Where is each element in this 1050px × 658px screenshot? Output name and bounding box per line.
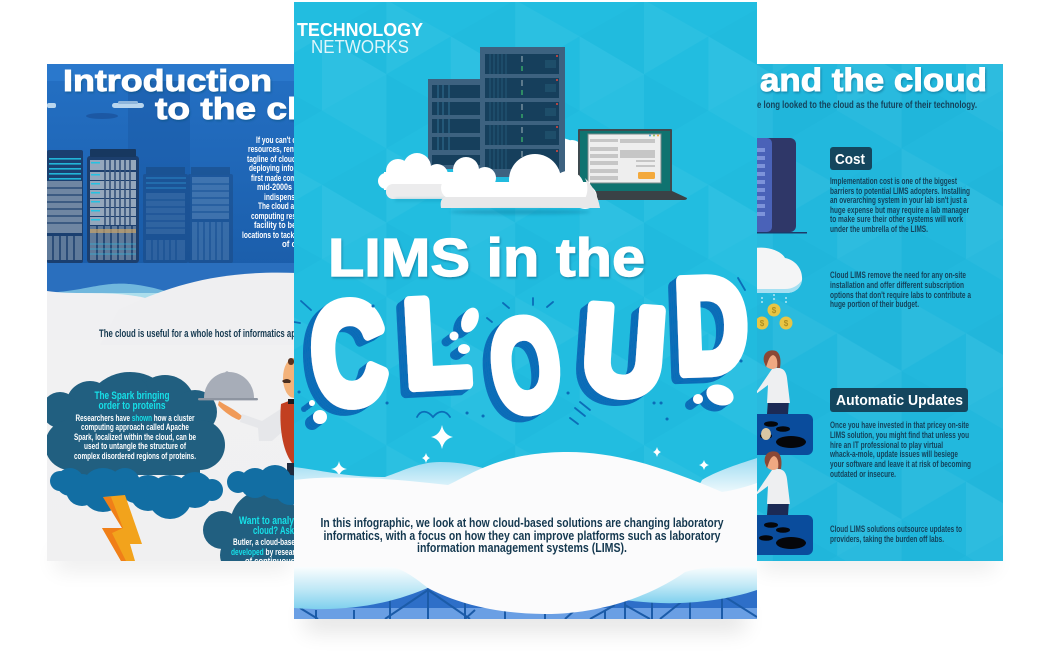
text: spark: used to untangle the structure of (84, 441, 187, 451)
panel shadows (55, 550, 995, 632)
heading: cost (830, 147, 872, 170)
text: cost problem: under the umbrella of the LIMS. (830, 224, 928, 234)
waiter with cloche (198, 358, 294, 476)
panel: introduction to the cloud (47, 64, 294, 561)
title: introduction to the cloud: to the clo (155, 91, 320, 126)
sparkles (331, 425, 709, 477)
faded server racks (143, 167, 233, 263)
short server rack (428, 79, 480, 169)
title: introduction to the cloud: Introduction (63, 63, 272, 98)
title: introduction to the cloud (64, 68, 294, 122)
decorative cloud blobs (309, 305, 737, 424)
light-blue waves (294, 458, 757, 609)
tall server rack (480, 47, 565, 177)
logo: technology networks (297, 23, 423, 53)
icon: server (757, 138, 807, 234)
panel: cover (294, 2, 757, 619)
text: spark: order to proteins (98, 400, 166, 412)
intro text: The cloud al (258, 201, 296, 211)
server rack 1 (47, 150, 83, 263)
icon: cloud raining coins (754, 248, 802, 330)
intro paragraph: informatics, with a focus on how they can improve platforms such as laboratory (324, 528, 721, 543)
heading: cost: Cost (835, 151, 865, 168)
intro text: deploying infor (249, 163, 296, 173)
text: updates problem: outdated or insecure. (830, 469, 896, 479)
heading: cloud lettering: U (579, 279, 669, 422)
server rack 2 (87, 149, 139, 263)
heading: automatic updates (830, 388, 968, 412)
text: updates solution (830, 524, 962, 544)
laptop (578, 129, 687, 200)
text: cost problem: huge expense but may require a lab manager (830, 205, 969, 215)
intro paragraph: In this infographic, we look at how cloud-based solutions are changing laboratory (320, 515, 724, 530)
cloud: analysis (203, 465, 294, 561)
intro text: facility to be (254, 220, 296, 230)
intro text: locations to tackl (242, 230, 296, 240)
motion dashes (294, 278, 745, 424)
illustration: woman with empty holes (757, 451, 813, 555)
panel: lims and the cloud (745, 62, 1003, 561)
heading: cloud lettering (303, 274, 748, 422)
heading: lims in the: LIMS in the (328, 228, 645, 288)
text: spark: Spark, localized within the cloud, can be (74, 432, 196, 442)
text: analysis: of continuous (245, 556, 295, 566)
text: cost solution: installation and offer different subscription (830, 280, 964, 290)
text: cost solution: Cloud LIMS remove the need for any on-site (830, 270, 966, 280)
text: analysis: developed by resear (231, 547, 295, 557)
text: updates solution: Cloud LIMS solutions outsource updates to (830, 524, 962, 534)
text: spark: complex disordered regions of proteins. (74, 451, 196, 461)
heading: cloud lettering: L (401, 273, 473, 413)
text: cost solution: options that don't require labs to contribute a (830, 290, 972, 300)
intro text (242, 135, 296, 249)
subheading: The cloud is useful for a whole host of informatics ap (99, 328, 296, 340)
text: spark: computing approach called Apache (81, 422, 189, 432)
intro paragraph: information management systems (LIMS). (417, 540, 627, 555)
text: analysis: cloud? Ask (253, 525, 295, 537)
text: cost solution: huge portion of their budget. (830, 299, 919, 309)
text: updates problem: your software and leave it at risk of becoming (830, 459, 971, 469)
logo: technology networks: NETWORKS (311, 37, 409, 57)
heading: cloud lettering: C (306, 274, 391, 435)
intro text: of c (282, 239, 296, 249)
intro text: mid-2000s (257, 182, 292, 192)
text: updates problem (829, 420, 971, 479)
intro text: first made com (251, 173, 296, 183)
text: analysis: Butler, a cloud-base (233, 537, 295, 547)
intro text: If you can't c (256, 135, 296, 145)
intro text: tagline of cloud (247, 154, 296, 164)
title: and the cloud: and the cloud (760, 62, 987, 98)
text: spark: Researchers have shown how a cluster (76, 413, 195, 423)
icon: cloud raining coins: $ (760, 319, 765, 328)
text: updates problem: Once you have invested in that pricey on-site (830, 420, 969, 430)
text: cost problem: Implementation cost is one of the biggest (830, 176, 957, 186)
text: spark: The Spark bringing (94, 390, 170, 402)
text: updates problem: hire an IT professional to play virtual (830, 440, 943, 450)
text: analysis (231, 516, 294, 561)
text: cost problem: to make sure their other systems will work (830, 214, 964, 224)
illustration: woman whacking moles (757, 350, 813, 455)
text: updates problem: whack-a-mole, update issues will besiege (829, 449, 958, 459)
icon: cloud raining coins: $ (784, 319, 789, 328)
text: cost problem: an overarching system in your lab isn't just a (830, 195, 968, 205)
white clouds (378, 153, 600, 214)
ceiling lights (47, 101, 144, 119)
text: cost problem (830, 176, 970, 234)
intro text: computing res (251, 211, 296, 221)
heading: automatic updates: Automatic Updates (836, 392, 963, 409)
logo: technology networks: TECHNOLOGY (297, 20, 423, 40)
text: spark (74, 390, 196, 461)
text: updates solution: providers, taking the burden off labs. (830, 534, 944, 544)
intro text: indispens (264, 192, 295, 202)
bottom structure (294, 580, 757, 619)
cloud: spark (42, 372, 225, 519)
heading: cloud lettering: D (673, 250, 750, 401)
subtitle: e long looked to the cloud as the future of their technology. (757, 100, 977, 111)
intro paragraph (320, 515, 724, 555)
illustration: servers, laptop and clouds (378, 47, 687, 214)
icon: cloud raining coins: $ (772, 306, 777, 315)
text: cost solution (830, 270, 972, 309)
icon: lightning bolt (102, 495, 142, 561)
text: cost problem: barriers to potential LIMS adopters. Installing (830, 186, 970, 196)
white cloud divider (47, 272, 294, 298)
white wave (294, 452, 757, 614)
back cloud (565, 138, 578, 175)
text: updates problem: LIMS solution, you might find that unless you (830, 430, 969, 440)
text: analysis: Want to analy (239, 515, 294, 527)
intro text: resources, rent (248, 144, 296, 154)
heading: cloud lettering: O (483, 291, 568, 441)
